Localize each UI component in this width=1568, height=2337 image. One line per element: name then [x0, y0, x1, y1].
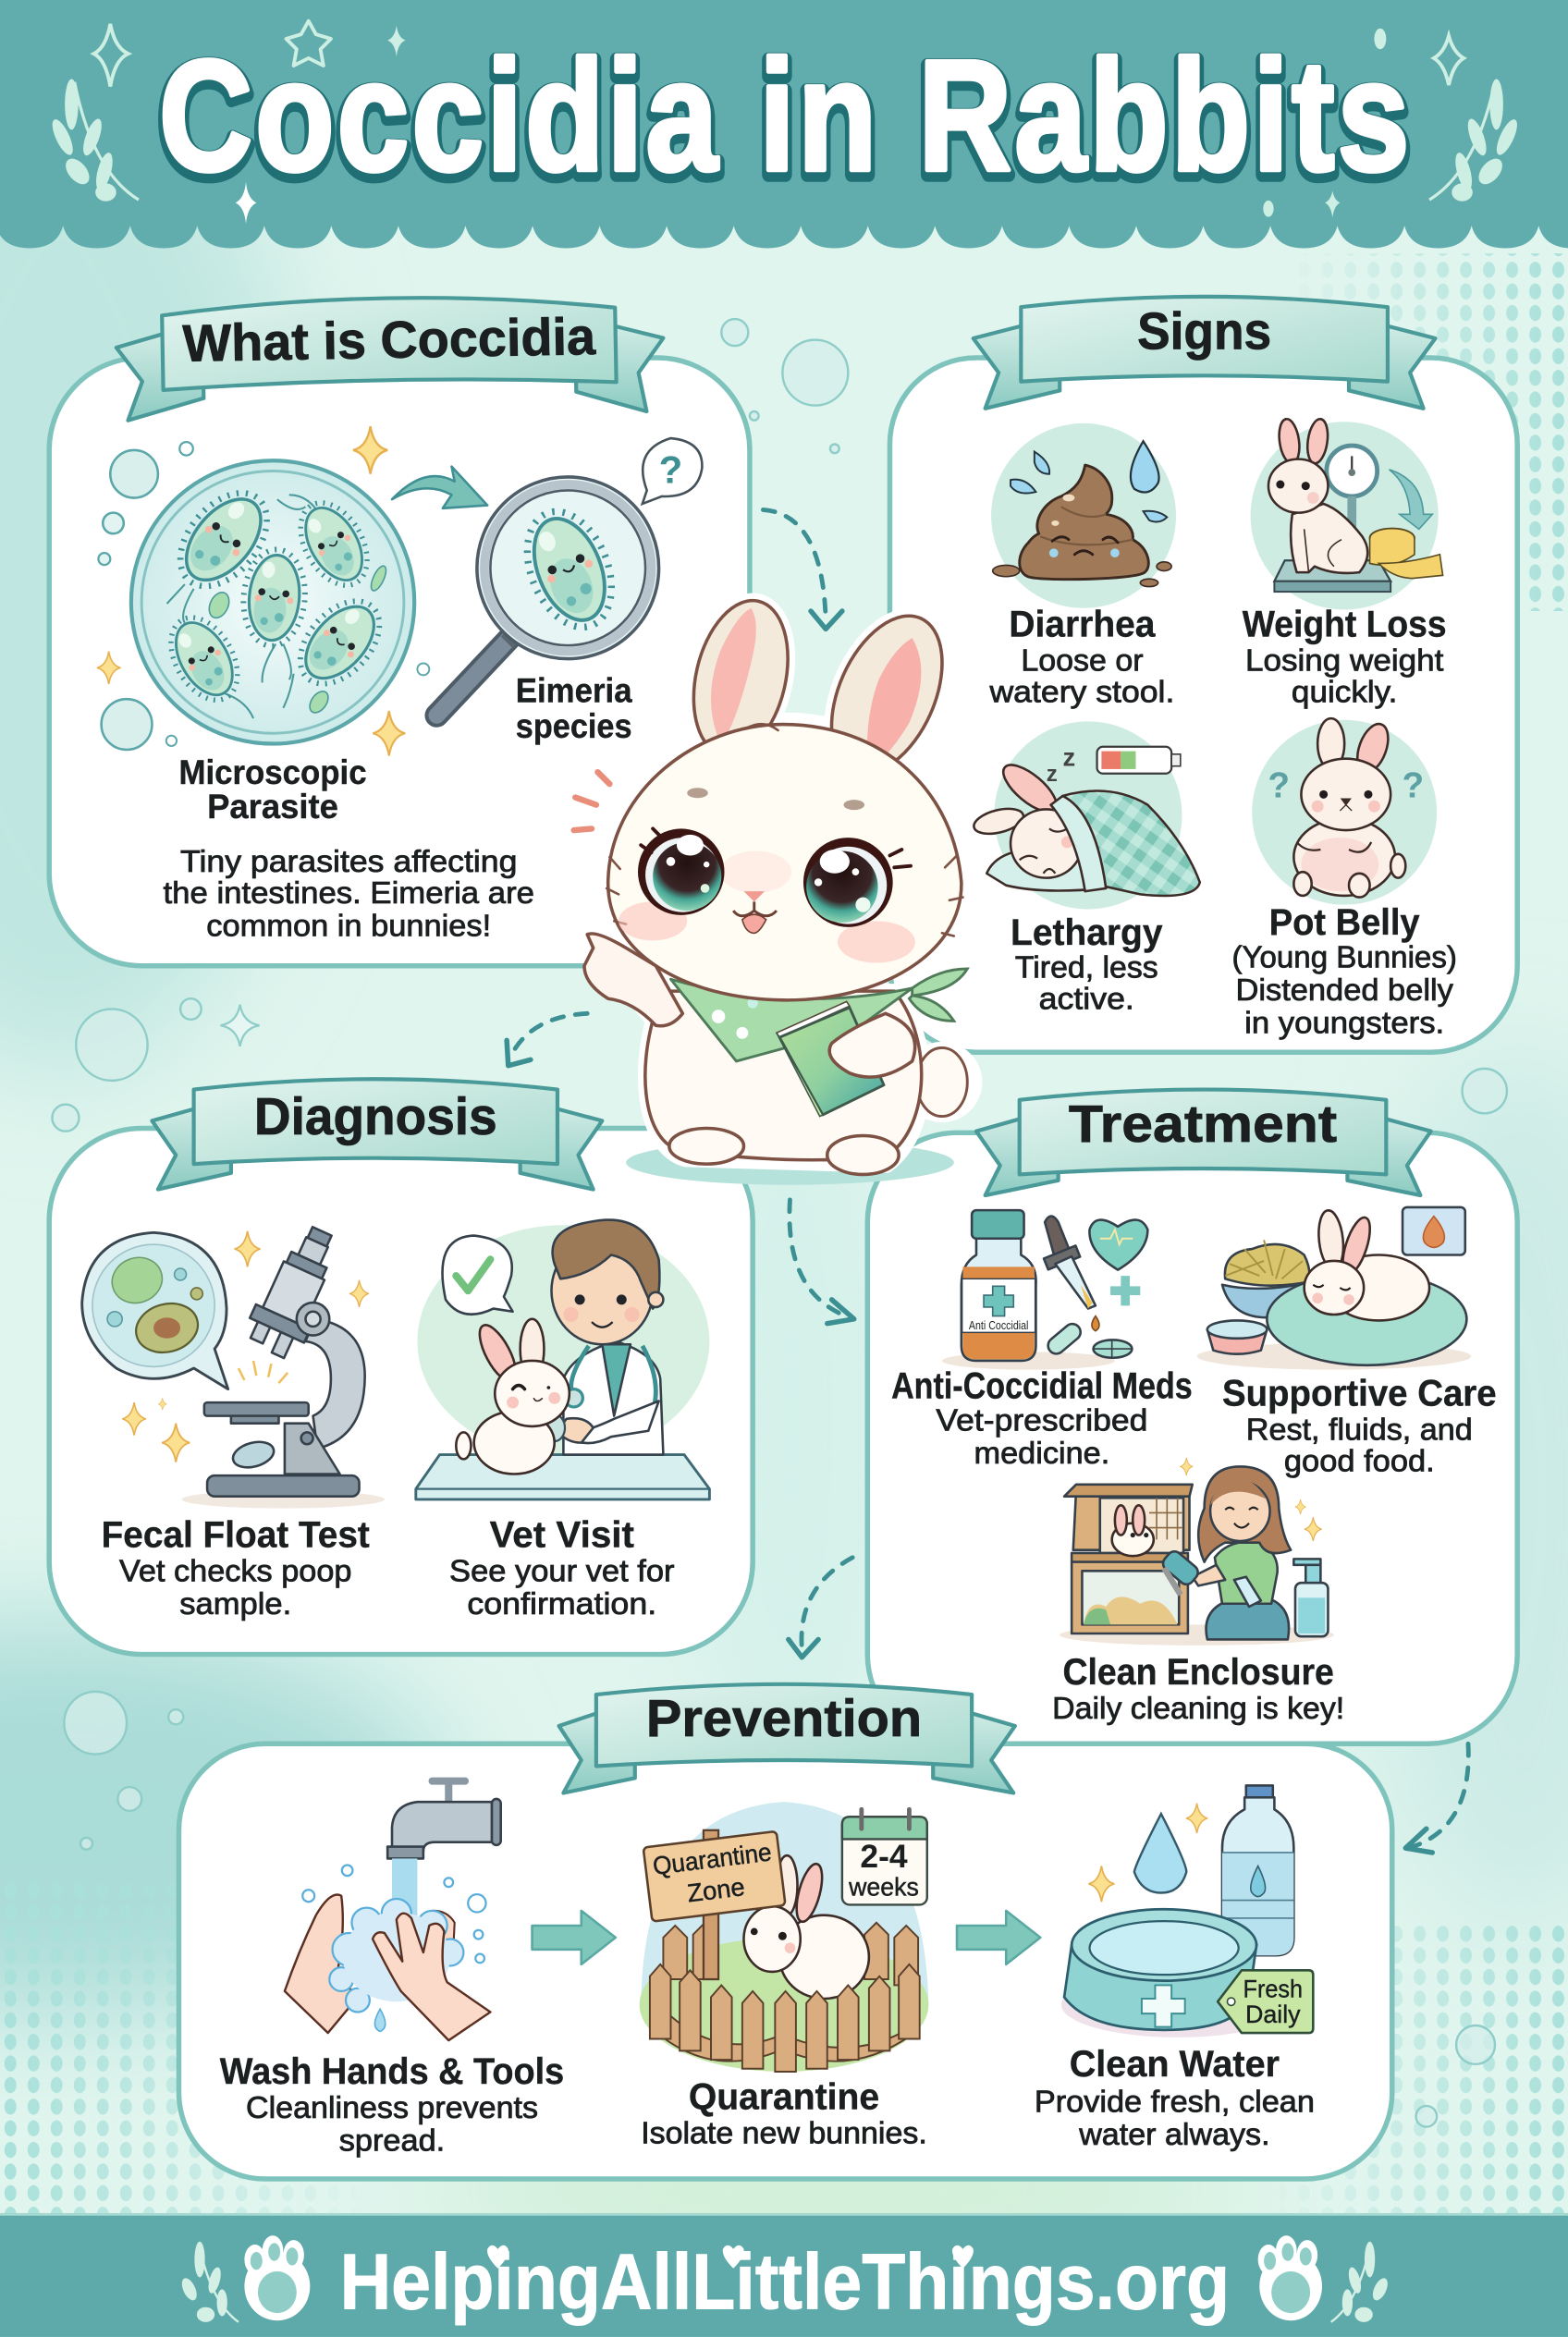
arrow: treatment to water [1405, 1744, 1468, 1853]
label: pot belly: Pot Belly [1269, 901, 1420, 943]
label: pot belly: (Young Bunnies) [1231, 940, 1457, 974]
label: eimeria species: species [516, 706, 632, 745]
label: eimeria species: Eimeria [516, 670, 632, 709]
label: weight loss: Weight Loss [1243, 603, 1447, 644]
icon: washing hands [285, 1781, 501, 2040]
ribbon: diagnosis: Diagnosis [254, 1087, 497, 1145]
arrow: to prevention [789, 1558, 852, 1658]
panel: prevention [178, 1684, 1392, 2179]
fur tufts [606, 724, 962, 936]
label: quarantine: Isolate new bunnies. [641, 2116, 927, 2150]
label: wash hands and tools: Cleanliness prevents [246, 2091, 538, 2125]
label: lethargy: Tired, less [1015, 951, 1158, 985]
icon: diarrhea [991, 423, 1176, 608]
icon: water bowl and bottle: Daily [1245, 2001, 1301, 2028]
title: Coccidia in Rabbits [159, 29, 1412, 204]
book [777, 1001, 884, 1117]
label: fecal float test [102, 1513, 370, 1621]
ribbon: treatment [976, 1090, 1431, 1195]
icon: lethargy [972, 721, 1200, 909]
label: lethargy [1011, 912, 1163, 1016]
pointing arm [584, 934, 682, 1026]
label: clean enclosure [1052, 1651, 1344, 1726]
icon: microscope [122, 1219, 385, 1509]
label: weight loss [1243, 603, 1447, 709]
calendar: 2-4 weeks: 2-4 [860, 1838, 908, 1875]
label: anti-coccidial meds: medicine. [974, 1437, 1109, 1471]
label: diarrhea: Diarrhea [1009, 603, 1156, 644]
panel: signs [889, 297, 1517, 1052]
label: fecal float test: Fecal Float Test [102, 1513, 370, 1555]
ribbon: what is coccidia [116, 293, 665, 421]
bunny white halo [586, 591, 974, 1166]
left eye [638, 828, 725, 915]
icon: lethargy: z [1047, 762, 1058, 787]
icon: lethargy: z [1062, 743, 1075, 772]
icon: medicine bottle and dropper [942, 1210, 1147, 1370]
icon: petri dish of parasites [131, 460, 414, 744]
label: wash hands and tools: spread. [339, 2123, 445, 2158]
icon: left sprig [178, 2242, 239, 2322]
brows [687, 788, 864, 810]
footer bar [0, 2213, 1568, 2337]
background bubbles [52, 319, 1507, 2127]
label: lethargy: active. [1039, 982, 1134, 1016]
ribbon: treatment: Treatment [1069, 1095, 1337, 1153]
label: clean water: Provide fresh, clean [1035, 2086, 1315, 2120]
label: weight loss: quickly. [1292, 675, 1397, 709]
icon: weight loss [1251, 418, 1443, 609]
label: vet visit: confirmation. [467, 1587, 656, 1621]
label: microscopic parasite: Parasite [207, 787, 338, 826]
icon: medicine bottle and dropper: Anti Coccidial [969, 1318, 1028, 1332]
title: Coccidia in Rabbits [159, 33, 1412, 209]
icon: bunny resting on cushion [1197, 1207, 1471, 1370]
arrow: to treatment [790, 1200, 854, 1324]
label: wash hands and tools [220, 2050, 564, 2158]
label: pot belly: Distended belly [1235, 973, 1453, 1008]
mascot bunny [574, 591, 974, 1185]
icon: microscope slide bubble [82, 1232, 228, 1389]
label: pot belly: in youngsters. [1244, 1006, 1444, 1040]
arrow: wash to quarantine [533, 1911, 616, 1964]
arrow: to signs [763, 509, 842, 629]
feet [669, 1128, 899, 1174]
nose and mouth [733, 891, 777, 933]
panel: treatment [867, 1090, 1517, 1744]
calendar: 2-4 weeks [842, 1809, 927, 1904]
icon: water bowl and bottle [1061, 1785, 1313, 2037]
icon: vet with bunny [416, 1220, 709, 1499]
text: description: Tiny parasites affecting [180, 845, 517, 879]
panel: diagnosis [49, 1079, 753, 1655]
sign: quarantine zone [643, 1831, 786, 1922]
calendar: 2-4 weeks: weeks [848, 1873, 919, 1902]
text: description: common in bunnies! [206, 910, 491, 944]
label: diarrhea: watery stool. [988, 675, 1174, 709]
label: diarrhea [988, 603, 1174, 709]
label: anti-coccidial meds: Anti-Coccidial Meds [891, 1364, 1193, 1406]
arm holding book [829, 1013, 915, 1077]
icon: question speech bubble: ? [659, 447, 682, 491]
label: fecal float test: sample. [179, 1587, 291, 1621]
label: vet visit: Vet Visit [490, 1513, 634, 1555]
footer hearts [487, 2245, 974, 2269]
icon: pot belly: ? [1268, 766, 1290, 806]
label: quarantine [641, 2075, 927, 2150]
label: clean water: Clean Water [1070, 2043, 1280, 2085]
label: vet visit: See your vet for [449, 1555, 675, 1589]
label: vet visit [449, 1513, 675, 1621]
header decorations: sparkles and leaf sprigs [48, 21, 1521, 224]
sign: quarantine zone: Quarantine [651, 1837, 773, 1880]
label: anti-coccidial meds: Vet-prescribed [936, 1404, 1147, 1438]
arrow: to diagnosis [507, 1013, 587, 1066]
label: clean enclosure: Daily cleaning is key! [1052, 1692, 1344, 1726]
blush [619, 851, 915, 963]
panel: what is coccidia [49, 293, 750, 966]
text: description: the intestines. Eimeria are [164, 876, 534, 911]
right eye [803, 838, 911, 927]
label: diarrhea: Loose or [1021, 644, 1144, 679]
label: microscopic parasite [178, 752, 367, 826]
sign: quarantine zone: Zone [686, 1872, 746, 1908]
ribbon: prevention [559, 1684, 1015, 1793]
icon: right sprig [1331, 2242, 1390, 2322]
ears [680, 591, 964, 790]
label: supportive care: Supportive Care [1222, 1372, 1497, 1413]
label: anti-coccidial meds [891, 1364, 1193, 1471]
label: eimeria species [516, 670, 632, 745]
icon: small bubbles and sparkles [97, 426, 429, 755]
label: pot belly [1231, 901, 1457, 1040]
icon: right paw [1258, 2235, 1322, 2320]
icon: magnifying glass [436, 477, 659, 716]
ribbon: signs: Signs [1137, 301, 1271, 360]
label: clean water [1035, 2043, 1315, 2152]
label: weight loss: Losing weight [1245, 644, 1443, 679]
label: quarantine: Quarantine [689, 2075, 879, 2117]
head [608, 725, 962, 1000]
arrow: dish to magnifier [392, 467, 487, 508]
label: wash hands and tools: Wash Hands & Tools [220, 2050, 564, 2092]
body [645, 991, 922, 1160]
label: microscopic parasite: Microscopic [178, 752, 367, 791]
header banner with scalloped edge [0, 0, 1568, 248]
ribbon: prevention: Prevention [646, 1689, 922, 1747]
icon: pot belly [1252, 718, 1437, 905]
label: supportive care: good food. [1284, 1444, 1435, 1478]
label: supportive care: Rest, fluids, and [1246, 1413, 1473, 1447]
tail [916, 1047, 967, 1117]
label: supportive care [1222, 1372, 1497, 1478]
label: clean enclosure: Clean Enclosure [1062, 1651, 1334, 1693]
icon: quarantine zone [640, 1802, 928, 2072]
arrow: quarantine to water [957, 1911, 1040, 1964]
label: clean water: water always. [1078, 2118, 1270, 2152]
ribbon: diagnosis [152, 1079, 602, 1190]
footer text: HelpingAllLittleThings.org [340, 2238, 1230, 2326]
attention lines [574, 772, 609, 830]
ribbon: what is coccidia: What is Coccidia [182, 307, 596, 373]
icon: cleaning the hutch [1060, 1458, 1334, 1646]
text: description [164, 845, 534, 944]
label: fecal float test: Vet checks poop [119, 1555, 351, 1589]
ribbon: signs [974, 297, 1436, 409]
icon: water bowl and bottle: Fresh [1243, 1975, 1303, 2002]
icon: pot belly: ? [1403, 766, 1424, 806]
label: lethargy: Lethargy [1011, 912, 1163, 953]
scarf [670, 969, 967, 1061]
icon: left paw [244, 2235, 310, 2320]
icon: question speech bubble [643, 438, 702, 504]
